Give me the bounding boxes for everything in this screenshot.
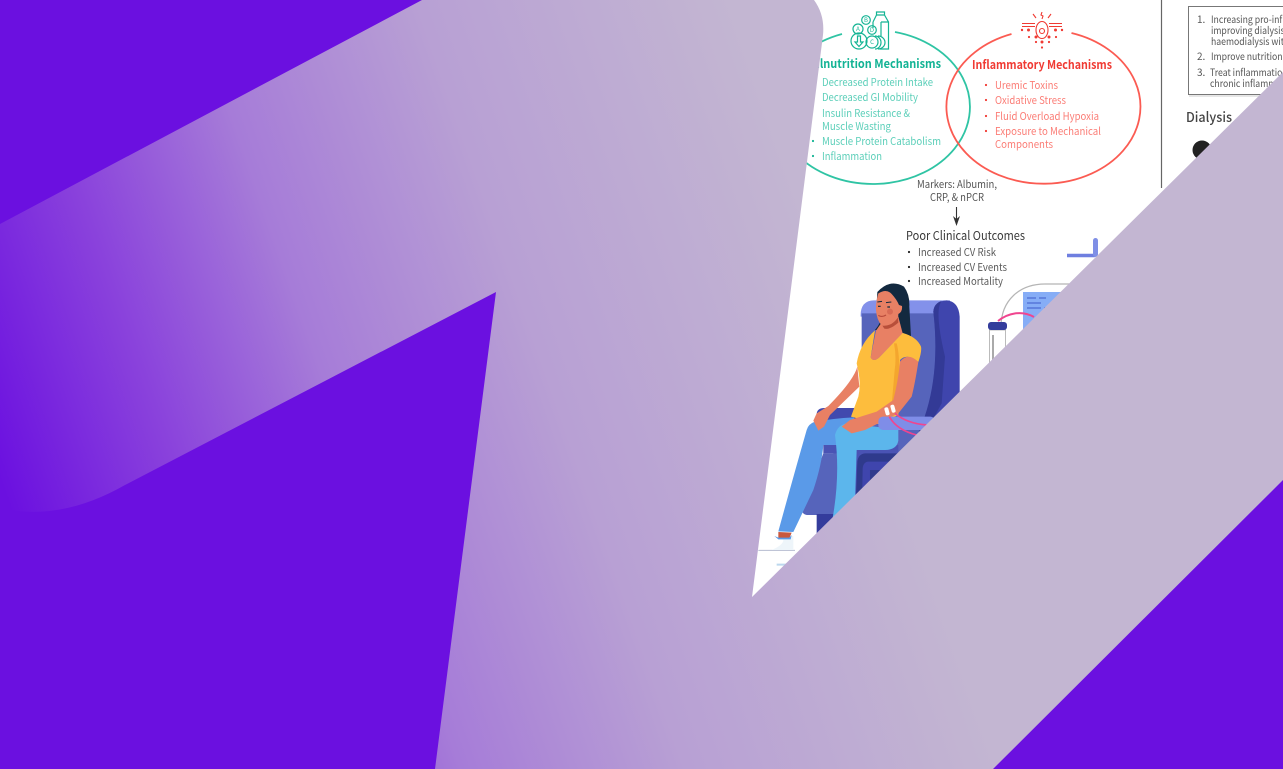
list: malnutrition mechanisms: Muscle Wasting [822, 119, 891, 134]
treatment list [1197, 11, 1283, 90]
near leg [832, 423, 898, 523]
list: malnutrition mechanisms: Decreased GI Mobility [822, 90, 918, 105]
icon: dialysis bullet [1192, 140, 1212, 160]
neck and chest [871, 317, 903, 360]
icon: inflammation [1021, 12, 1063, 49]
machine screen [1023, 292, 1073, 352]
treatment list: 1. [1197, 11, 1206, 26]
heading: malnutrition mechanisms: Malnutrition Mechanisms [804, 55, 941, 72]
floor [758, 549, 795, 552]
malnutrition circle [776, 32, 970, 184]
icon: nutrition [851, 12, 889, 49]
treatment list: improving dialysis [1211, 22, 1283, 37]
armrest [878, 417, 935, 430]
heading: dialysis: Dialysis [1186, 106, 1232, 126]
treatment list: 2. [1197, 48, 1206, 63]
list: inflammatory mechanisms: Fluid Overload Hypoxia [995, 109, 1099, 124]
heading: poor clinical outcomes: Poor Clinical Outcomes [906, 226, 1025, 244]
list: malnutrition mechanisms: Insulin Resistance & [822, 106, 910, 121]
shoe [772, 536, 793, 550]
markers text: Markers: Albumin, [917, 177, 997, 192]
blood line [998, 313, 1034, 321]
dialysis machine illustration [988, 238, 1098, 370]
icon: nutrition: C [870, 37, 874, 46]
inflammation circle [946, 33, 1140, 184]
white infographic sheet [740, 0, 1283, 640]
hair back [875, 284, 911, 337]
facial features [877, 301, 891, 303]
panel: treatment box [1188, 6, 1283, 96]
list: poor clinical outcomes: Increased CV Risk [918, 245, 996, 260]
list: inflammatory mechanisms: Oxidative Stress [995, 93, 1066, 108]
machine tubing arc [1001, 284, 1070, 327]
vertical divider [1160, 0, 1162, 188]
list: poor clinical outcomes: Increased Mortality [918, 274, 1003, 289]
heading: inflammatory mechanisms: Inflammatory Mechanisms [972, 56, 1112, 73]
near arm [842, 357, 918, 433]
face [876, 291, 902, 326]
tape [884, 407, 890, 416]
icon: nutrition: B [864, 15, 868, 24]
list: poor clinical outcomes [908, 245, 1007, 289]
markers text [917, 177, 997, 205]
list: inflammatory mechanisms [985, 78, 1101, 152]
icon: nutrition: D [870, 25, 874, 34]
list: poor clinical outcomes: Increased CV Events [918, 260, 1007, 275]
venn diagram: malnutrition and inflammation [776, 12, 1140, 184]
canister [990, 330, 1006, 370]
far leg [778, 417, 863, 532]
treatment list: 3. [1197, 64, 1206, 79]
list: inflammatory mechanisms: Uremic Toxins [995, 78, 1058, 93]
treatment list: Improve nutrition [1211, 48, 1283, 63]
list: inflammatory mechanisms: Exposure to Mechanical [995, 124, 1101, 139]
chair [802, 300, 960, 537]
list: malnutrition mechanisms: Decreased Protein Intake [822, 75, 933, 90]
list: malnutrition mechanisms [812, 75, 941, 164]
list: malnutrition mechanisms: Inflammation [822, 149, 882, 164]
icon: nutrition: A [856, 24, 860, 33]
list: inflammatory mechanisms: Components [995, 137, 1053, 152]
arrow: markers to outcomes [953, 207, 960, 226]
fistula lines [889, 413, 927, 435]
shirt [851, 330, 921, 424]
list: malnutrition mechanisms: Muscle Protein Catabolism [822, 134, 941, 149]
patient in dialysis chair [758, 284, 960, 565]
far arm [813, 367, 859, 431]
machine arm [1067, 254, 1095, 257]
markers text: CRP, & nPCR [930, 190, 984, 205]
